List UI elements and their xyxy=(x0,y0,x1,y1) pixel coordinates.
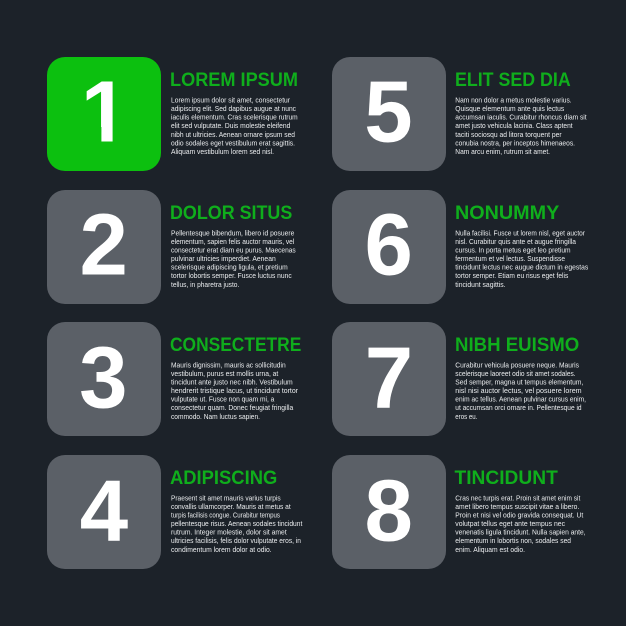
item 2 xyxy=(47,190,296,304)
text block 2: pulvinar ultricies imperdiet. Aenean xyxy=(171,254,276,263)
text block 2: elementum, sapien felis auctor mauris, vel xyxy=(171,237,295,246)
text block 6: cursus. In porta metus eget leo pretium xyxy=(455,246,571,254)
item 4 xyxy=(47,455,303,569)
text block 6: Nulla facilisi. Fusce ut lorem nisl, eget auctor xyxy=(455,228,585,237)
text block 3: tincidunt ante justo nec nibh. Vestibulum xyxy=(171,378,293,386)
text block 1: elit sed vulputate. Duis molestie eleifend xyxy=(171,121,290,130)
text block 3: Mauris dignissim, mauris ac sollicitudin xyxy=(171,360,286,369)
number box 4: 4 xyxy=(80,462,128,560)
text block 5: Quisque elementum ante quis lectus xyxy=(455,104,565,113)
text block 2: Pellentesque bibendum, libero id posuere xyxy=(171,228,294,237)
number box 7 xyxy=(332,322,446,436)
text block 3: vulputate ut. Fusce non quam mi, a xyxy=(171,395,275,404)
number box 3 xyxy=(47,322,161,436)
text block 1: iaculis elementum. Cras scelerisque rutrum xyxy=(171,113,298,122)
text block 3: commodo. Nam luctus sapien. xyxy=(171,412,260,421)
text block 6 xyxy=(455,228,589,289)
text block 1: odio sodales eget vestibulum erat sagittis. xyxy=(171,138,295,147)
heading 3: CONSECTETRE xyxy=(170,335,301,356)
text block 6: tincidunt lectus nec augue dictum in egestas xyxy=(455,263,589,272)
text block 5: conubia nostra, per inceptos himenaeos. xyxy=(455,138,575,147)
text block 1: Lorem ipsum dolor sit amet, consectetur xyxy=(171,96,290,104)
item 1 xyxy=(47,57,298,171)
text block 8: enim. Aliquam est odio. xyxy=(455,545,525,554)
text block 8: elementum in lobortis non, sodales sed xyxy=(455,536,571,545)
text block 8: Proin et nisi vel odio gravida consequat. Ut xyxy=(455,510,584,520)
text block 8: amet libero tempus suscipit vitae a libero. xyxy=(455,502,579,511)
text block 2: tortor lobortis semper. Fusce luctus nunc xyxy=(171,271,292,280)
text block 4: Praesent sit amet mauris varius turpis xyxy=(171,493,281,502)
number box 5: 5 xyxy=(364,64,413,161)
number box 6 xyxy=(332,190,446,304)
text block 5: taciti sociosqu ad litora torquent per xyxy=(455,130,562,139)
item 5 xyxy=(332,57,587,171)
text block 1: nibh ut ultricies. Aenean ornare ipsum sed xyxy=(171,130,295,139)
number box 4 xyxy=(47,455,161,569)
number box 7: 7 xyxy=(365,330,413,426)
text block 3: consectetur quam. Donec feugiat fringilla xyxy=(171,403,294,412)
text block 8: venenatis ligula tincidunt. Nulla sapien ante, xyxy=(455,528,586,537)
text block 4: turpis facilisis congue. Curabitur tempus xyxy=(171,510,280,520)
text block 1: Aliquam vestibulum lorem sed nisl. xyxy=(171,147,274,156)
number box 8 xyxy=(332,455,446,569)
heading 1: LOREM IPSUM xyxy=(170,70,298,91)
text block 5: Nam arcu enim, rutrum sit amet. xyxy=(455,147,550,156)
text block 7: scelerisque laoreet odio sit amet sodales. xyxy=(455,369,576,378)
number box 2 xyxy=(47,190,161,304)
text block 7: eros eu. xyxy=(455,412,477,421)
heading 8: TINCIDUNT xyxy=(454,468,558,489)
text block 5: accumsan iaculis. Curabitur rhoncus diam sit xyxy=(455,113,587,122)
text block 7: ut accumsan orci ornare in. Pellentesque id xyxy=(455,403,582,412)
text block 4: condimentum lorem dolor at odio. xyxy=(171,545,272,554)
text block 2: tellus, in pharetra justo. xyxy=(171,280,239,289)
item 7 xyxy=(332,322,586,436)
text block 8: Cras nec turpis erat. Proin sit amet enim sit xyxy=(455,493,581,502)
heading 2: DOLOR SITUS xyxy=(170,203,292,224)
text block 5 xyxy=(455,96,587,156)
text block 3 xyxy=(171,360,298,421)
text block 7: enim ac tellus. Aenean pulvinar cursus enim, xyxy=(455,395,586,404)
heading 5: ELIT SED DIA xyxy=(455,70,571,91)
number box 6: 6 xyxy=(365,196,413,293)
text block 1: adipiscing elit. Sed dapibus augue at nunc xyxy=(171,104,296,113)
heading 4: ADIPISCING xyxy=(170,468,277,489)
text block 4: pellentesque risus. Aenean sodales tincidunt xyxy=(171,519,303,528)
text block 7 xyxy=(455,360,586,421)
text block 5: Nam non dolor a metus molestie varius. xyxy=(455,96,572,104)
item 8 xyxy=(332,455,586,569)
text block 4 xyxy=(171,493,303,554)
text block 8: volutpat tellus eget ante tempus nec xyxy=(455,519,565,528)
text block 2: consectetur erat diam eu purus. Maecenas xyxy=(171,246,296,254)
text block 7: Sed semper, magna ut tempus elementum, xyxy=(455,378,583,386)
text block 5: amet justo vehicula lacinia. Class aptent xyxy=(455,121,573,130)
number box 8: 8 xyxy=(365,462,413,560)
number box 2: 2 xyxy=(80,196,128,293)
text block 3: vestibulum, purus est mollis urna, at xyxy=(171,369,279,378)
text block 6: fermentum et vel lectus. Suspendisse xyxy=(455,254,565,263)
text block 2: scelerisque adipiscing ligula, et pretium xyxy=(171,263,288,272)
text block 4: ultricies facilisis, felis dolor vulputate eros, in xyxy=(171,536,301,545)
text block 7: Curabitur vehicula posuere neque. Mauris xyxy=(455,360,579,369)
number box 3: 3 xyxy=(79,330,127,426)
item 6 xyxy=(332,190,589,304)
text block 4: convallis ullamcorper. Mauris at metus at xyxy=(171,502,292,511)
text block 6: tincidunt sagittis. xyxy=(455,280,506,289)
number box 1 xyxy=(47,57,161,171)
item 3 xyxy=(47,322,301,436)
heading 7: NIBH EUISMO xyxy=(455,335,579,356)
text block 6: nisl. Curabitur quis ante et augue fringilla xyxy=(455,237,577,246)
text block 1 xyxy=(171,96,298,156)
text block 2 xyxy=(171,228,296,289)
number box 5 xyxy=(332,57,446,171)
number box 1: 1 xyxy=(81,64,129,161)
text block 8 xyxy=(455,493,586,554)
text block 3: hendrerit tristique lacus, ut tincidunt tortor xyxy=(171,386,298,395)
heading 6: NONUMMY xyxy=(455,203,560,224)
text block 6: tortor semper. Etiam eu risus eget felis xyxy=(455,271,569,280)
text block 7: nisl nisi auctor lectus, vel posuere lorem xyxy=(455,386,582,395)
text block 4: rutrum. Integer molestie, dolor sit amet xyxy=(171,528,288,537)
